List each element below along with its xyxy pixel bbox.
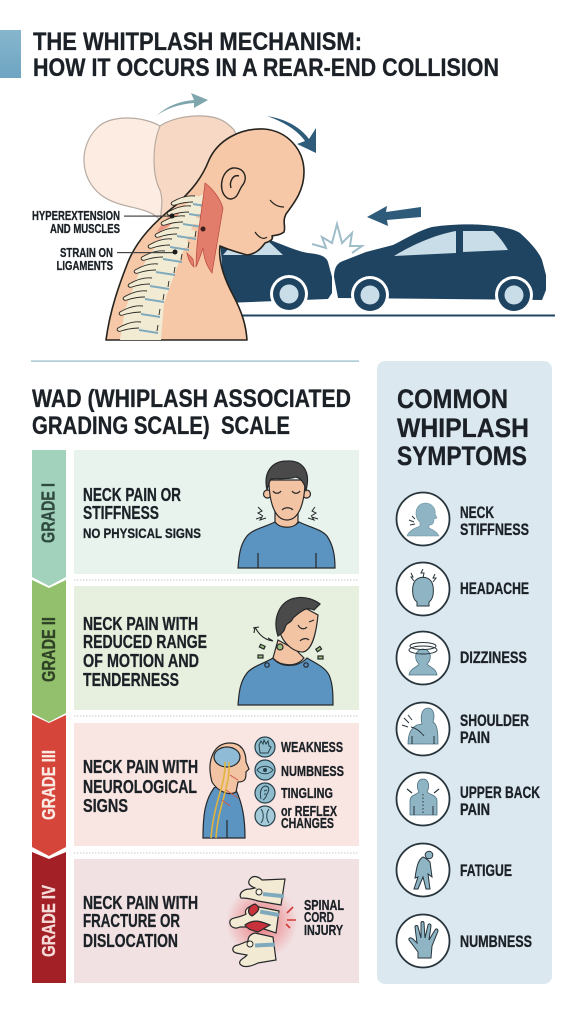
text: Grade I: NO PHYSICAL SIGNS xyxy=(83,525,201,541)
impact burst xyxy=(312,224,362,253)
icon: nervous system profile xyxy=(203,743,249,838)
callout: strain on ligaments xyxy=(56,226,206,273)
title: THE WHITPLASH MECHANISM: xyxy=(33,28,362,56)
symptom: neck stiffness: NECK xyxy=(460,504,494,522)
symptom: dizziness: DIZZINESS xyxy=(460,649,527,667)
icon: man with limited neck motion xyxy=(238,597,333,705)
list: neurological signs: CHANGES xyxy=(281,816,334,832)
grade tab II xyxy=(32,580,66,722)
icon: fractured vertebrae xyxy=(226,877,298,967)
label: spinal cord injury: INJURY xyxy=(304,923,343,939)
arrow: head moves forward xyxy=(267,116,316,153)
label: spinal cord injury: SPINAL xyxy=(304,898,344,914)
list: neurological signs: or REFLEX xyxy=(281,804,337,820)
grade tab III xyxy=(32,715,66,856)
text: Grade IV: FRACTURE OR xyxy=(83,910,180,931)
dotted separator xyxy=(74,852,359,854)
icon: reflex changes xyxy=(255,806,275,826)
icon: hand weakness xyxy=(255,737,275,757)
panel: Grade II xyxy=(32,580,359,722)
dotted separator xyxy=(74,579,359,581)
callout: hyperextension and muscles xyxy=(32,209,174,236)
neck muscles xyxy=(187,183,223,273)
back muscle strain patch xyxy=(157,208,182,232)
callout: strain on ligaments: STRAIN ON xyxy=(60,246,113,260)
label: spinal cord injury xyxy=(304,898,344,939)
text: Grade IV: DISLOCATION xyxy=(83,930,178,951)
text: Grade II: REDUCED RANGE xyxy=(83,631,207,652)
title accent bar xyxy=(0,30,21,78)
title xyxy=(33,28,499,82)
grade tab III: GRADE III xyxy=(39,750,59,820)
icon: eye numbness xyxy=(255,760,275,780)
list: neurological signs xyxy=(255,737,344,832)
car: front car behind head xyxy=(220,236,332,313)
text: Grade IV: NECK PAIN WITH xyxy=(83,892,198,913)
text: Grade III: SIGNS xyxy=(83,795,128,816)
symptom: headache: HEADACHE xyxy=(460,580,529,598)
heading: symptoms: COMMON xyxy=(397,384,508,414)
heading: symptoms: SYMPTOMS xyxy=(397,441,527,471)
icon: man with neck pain xyxy=(238,461,335,568)
list: neurological signs: NUMBNESS xyxy=(281,764,344,780)
heading: WAD scale xyxy=(32,385,351,440)
grade tab IV xyxy=(32,852,66,983)
symptom: fatigue xyxy=(396,844,512,896)
ghost head: farthest xyxy=(84,118,200,258)
symptom: dizziness xyxy=(396,632,527,684)
symptom: neck stiffness xyxy=(396,492,529,546)
arrow: head moves backward xyxy=(156,93,208,116)
text: Grade III: NEUROLOGICAL xyxy=(83,776,197,797)
symptom: numbness xyxy=(396,914,532,968)
text: Grade IV xyxy=(83,892,198,951)
text: Grade I xyxy=(83,484,201,541)
grade tab II: GRADE II xyxy=(39,617,59,682)
title: HOW IT OCCURS IN A REAR-END COLLISION xyxy=(33,54,499,82)
grade tab I xyxy=(32,450,66,586)
symptom: headache xyxy=(396,562,529,616)
symptom: shoulder pain: PAIN xyxy=(460,729,490,747)
heading: symptoms xyxy=(397,384,529,471)
callout: hyperextension and muscles: AND MUSCLES xyxy=(50,222,120,236)
spine xyxy=(117,193,212,340)
road line xyxy=(242,314,555,316)
dotted separator xyxy=(74,715,359,717)
list: neurological signs: TINGLING xyxy=(281,786,333,802)
text: Grade II: NECK PAIN WITH xyxy=(83,613,198,634)
list: neurological signs: WEAKNESS xyxy=(281,740,343,756)
text: Grade I: NECK PAIN OR xyxy=(83,484,181,505)
symptom: shoulder pain xyxy=(396,702,529,756)
panel: Grade I xyxy=(32,450,359,586)
text: Grade III xyxy=(83,756,198,816)
symptom: upper back pain xyxy=(396,772,540,826)
divider xyxy=(31,360,359,362)
panel: Grade IV xyxy=(32,852,359,983)
arrow: car motion xyxy=(367,206,421,226)
head and torso xyxy=(106,129,304,340)
text: Grade I: STIFFNESS xyxy=(83,502,159,523)
heading: WAD scale: GRADING SCALE) SCALE xyxy=(32,412,290,440)
eye and mouth xyxy=(255,200,284,238)
ghost head: middle xyxy=(154,116,236,222)
text: Grade III: NECK PAIN WITH xyxy=(83,756,198,777)
symptom: neck stiffness: STIFFNESS xyxy=(460,521,529,539)
panel: common whiplash symptoms xyxy=(377,361,552,984)
text: Grade II: TENDERNESS xyxy=(83,669,179,690)
icon: tingling xyxy=(255,783,275,803)
text: Grade II xyxy=(83,613,207,690)
car: rear car xyxy=(334,224,546,314)
symptom: upper back pain: UPPER BACK xyxy=(460,784,540,802)
callout: hyperextension and muscles: HYPEREXTENSION xyxy=(32,209,120,223)
label: spinal cord injury: CORD xyxy=(304,910,334,926)
callout: strain on ligaments: LIGAMENTS xyxy=(56,259,113,273)
panel: Grade III xyxy=(32,715,359,856)
symptom: numbness: NUMBNESS xyxy=(460,933,532,951)
text: Grade II: OF MOTION AND xyxy=(83,650,199,671)
heading: symptoms: WHIPLASH xyxy=(397,413,529,443)
symptom: upper back pain: PAIN xyxy=(460,801,490,819)
ear xyxy=(222,168,245,199)
illustration: whiplash mechanism xyxy=(32,93,555,340)
symptom: shoulder pain: SHOULDER xyxy=(460,712,529,730)
grade tab I: GRADE I xyxy=(38,483,58,543)
heading: WAD scale: WAD (WHIPLASH ASSOCIATED xyxy=(32,385,351,413)
symptom: fatigue: FATIGUE xyxy=(460,862,512,880)
grade tab IV: GRADE IV xyxy=(39,885,59,957)
